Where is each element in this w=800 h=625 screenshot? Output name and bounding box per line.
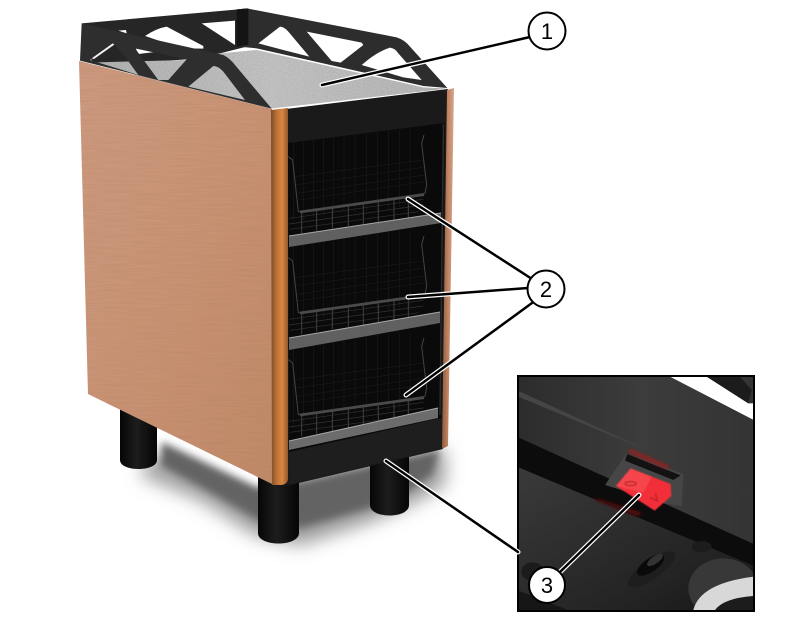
inset background (518, 376, 754, 611)
rear rail: left section (82, 8, 247, 65)
copper side panel (79, 61, 272, 484)
white gap (670, 377, 763, 425)
side rail with cut-outs (80, 23, 272, 109)
small stud left (521, 562, 544, 581)
upper plane (517, 377, 763, 503)
callout 1 (528, 12, 566, 50)
shelf middle (289, 312, 440, 350)
side rail opening sliver (92, 43, 114, 59)
switch recess (605, 453, 683, 506)
shelf top (289, 213, 441, 247)
leaders to item 2 (406, 199, 532, 395)
plate (97, 50, 447, 109)
leader to inset (386, 461, 518, 552)
rear rail cut-outs (118, 21, 422, 80)
dark slot in gap (707, 377, 752, 403)
callout 2: 2 (540, 277, 552, 302)
copper corner strip (271, 108, 288, 485)
leader to item 3 (560, 495, 639, 572)
base plinth (289, 418, 442, 484)
rear foot and grey knob (688, 558, 758, 618)
callout 1: 1 (541, 19, 553, 44)
mid plane (517, 396, 763, 552)
leg: rear right (370, 440, 409, 516)
basket bottom (288, 332, 427, 436)
basket top (288, 129, 427, 233)
leg: front (258, 470, 299, 544)
inset border (518, 376, 754, 611)
interior right edge (440, 124, 444, 415)
leg: rear left (120, 408, 157, 469)
shelf bottom (289, 408, 438, 450)
lower plane (517, 467, 763, 613)
callout 3 (529, 567, 565, 603)
front black carcass (286, 89, 448, 486)
bottom shadow (517, 590, 577, 613)
wire baskets (288, 129, 427, 436)
rear rail: right section (238, 8, 447, 88)
top rail and plate (80, 8, 447, 109)
oval fitting (623, 545, 680, 593)
black channel (517, 437, 763, 570)
copper rear strip (442, 88, 454, 449)
basket middle (288, 230, 427, 334)
rear rail corner shading (237, 8, 248, 47)
floor shadow (140, 442, 445, 545)
interior (288, 123, 445, 452)
callout 2 (528, 270, 564, 308)
inset panel (517, 376, 763, 618)
shelf rails (289, 213, 441, 450)
leader to item 1 (322, 37, 530, 85)
callout 3: 3 (541, 573, 553, 598)
red rocker switch (616, 468, 671, 511)
ridge line (517, 390, 763, 503)
leader lines (322, 37, 639, 572)
small stud centre (692, 541, 712, 552)
red glow (628, 449, 670, 469)
